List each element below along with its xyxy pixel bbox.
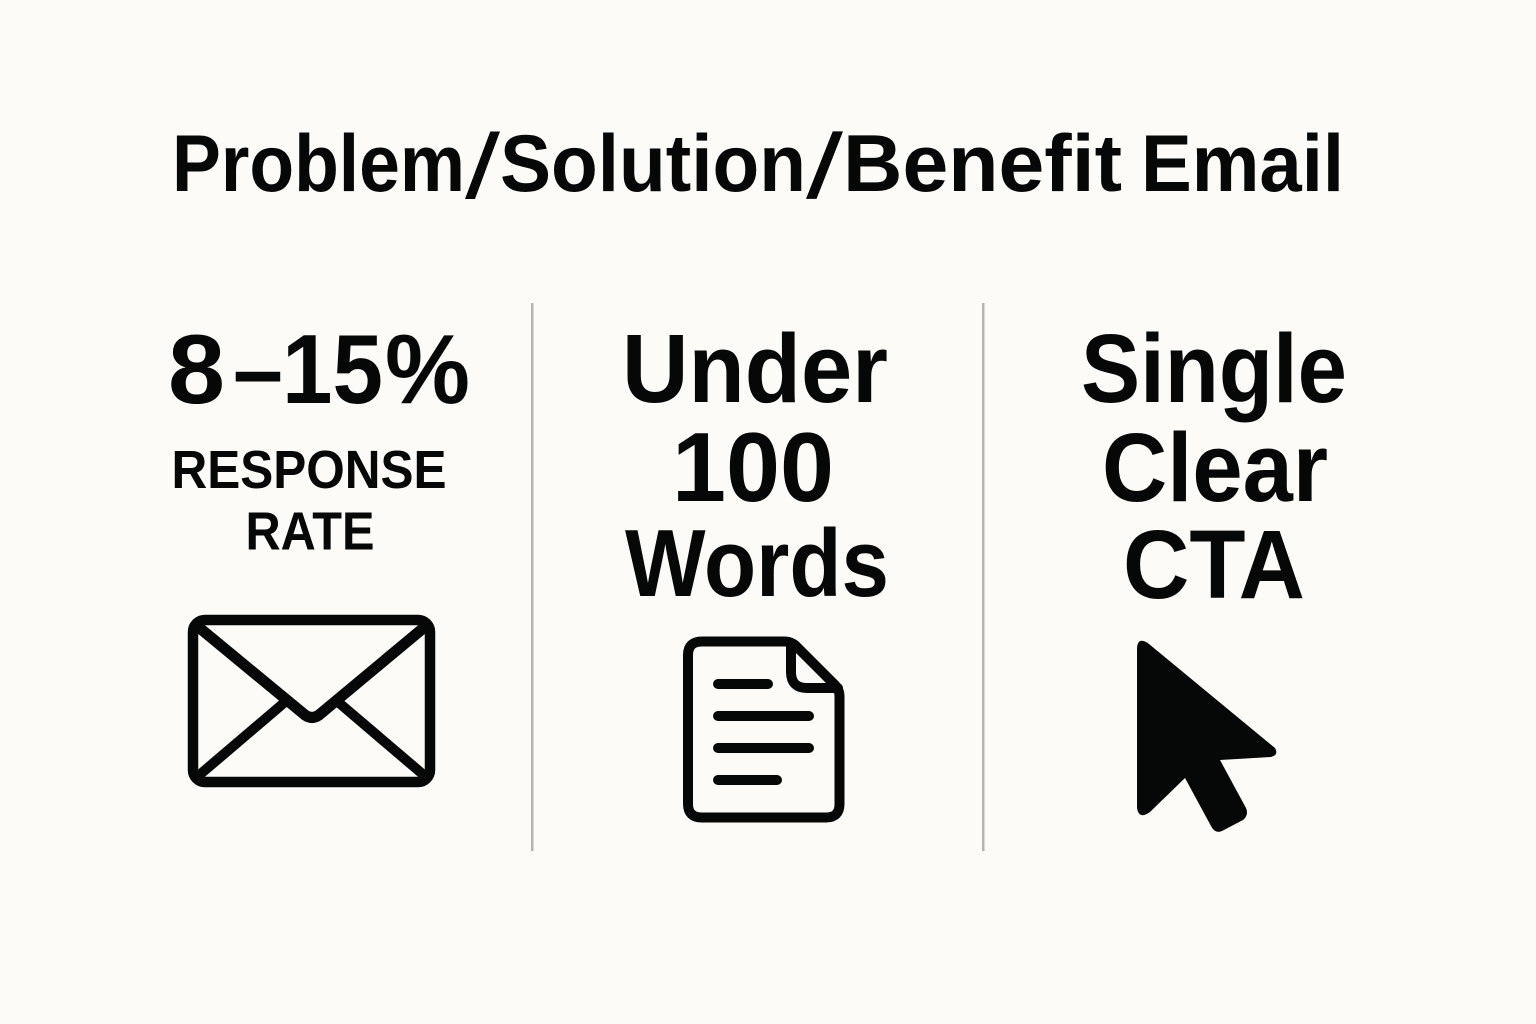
divider right (982, 303, 984, 851)
stat: under 100 words: Under (622, 314, 888, 423)
label: response rate: RATE (246, 502, 374, 562)
stat: single clear CTA: CTA (1123, 510, 1305, 619)
stat: single clear CTA: Single (1081, 314, 1347, 423)
stat: 8–15%: % (385, 314, 470, 424)
title: Email (1141, 119, 1344, 209)
icon: document (688, 642, 840, 818)
stat: under 100 words: 100 (672, 412, 834, 522)
stat: 8–15%: – (233, 314, 283, 424)
stat: under 100 words: Words (625, 510, 889, 617)
divider left (531, 303, 534, 851)
stat: 8–15%: 15 (282, 314, 383, 424)
title: Problem (172, 119, 465, 209)
stat: single clear CTA: Clear (1102, 413, 1328, 522)
label: response rate (172, 440, 446, 562)
title: / (806, 116, 844, 218)
icon: envelope (193, 620, 430, 782)
label: response rate: RESPONSE (172, 440, 446, 500)
title: Benefit (843, 119, 1122, 209)
stat: under 100 words (622, 314, 889, 617)
panel: word count (622, 314, 889, 818)
title: Solution (500, 119, 806, 209)
panel: response rate (168, 314, 470, 782)
icon: cursor arrow (1137, 641, 1276, 832)
title: / (465, 116, 501, 218)
stat: single clear CTA (1081, 314, 1347, 619)
stat: 8–15%: 8 (168, 314, 225, 424)
panel: call to action (1081, 314, 1347, 832)
